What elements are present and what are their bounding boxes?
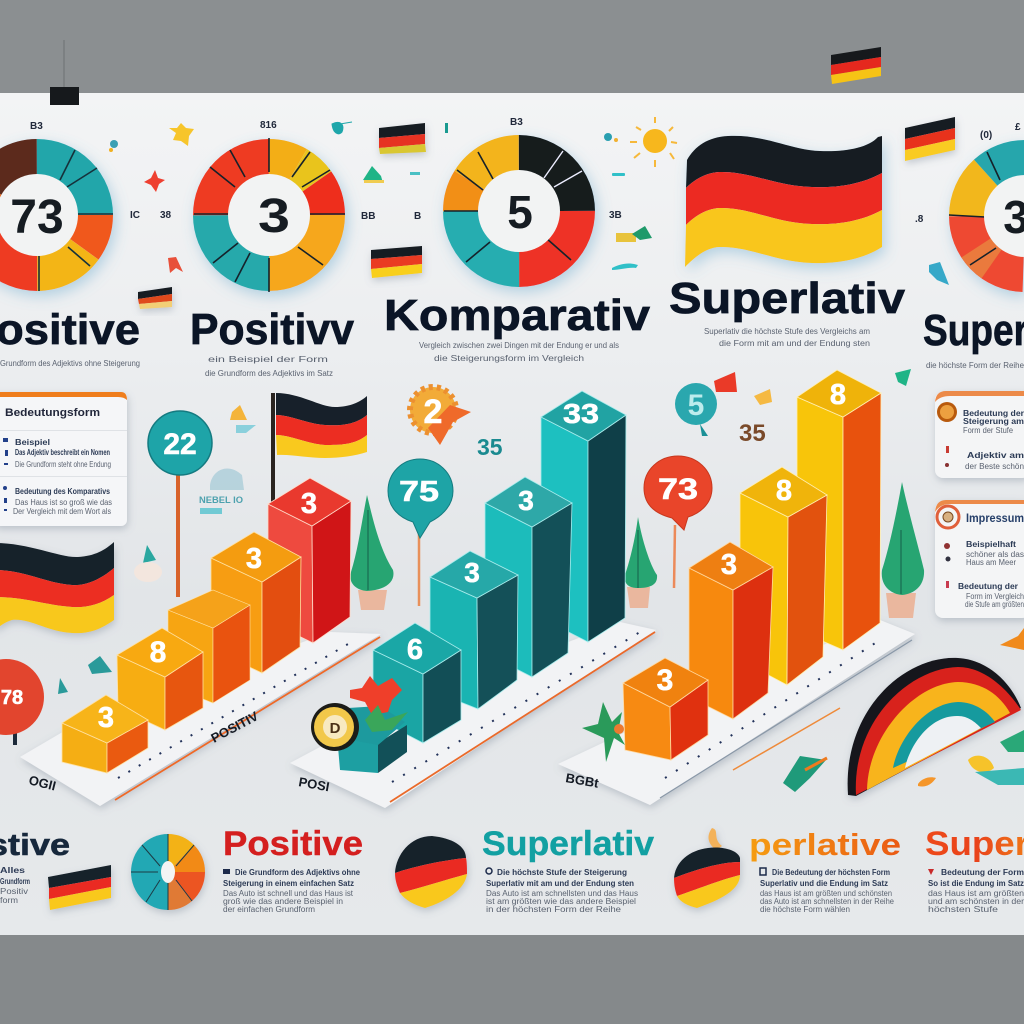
icon: star xyxy=(169,123,194,146)
pin: 22 xyxy=(148,411,212,597)
bar teal mid xyxy=(430,551,518,709)
heading: Positive left: ositive xyxy=(0,306,140,354)
small gauge labels: 3B xyxy=(609,210,622,221)
info card left: Bedeutung des Komparativs xyxy=(15,487,110,496)
footer text 4: Superlativ und die Endung im Satz xyxy=(760,879,888,888)
footer heading: perlative: perlative xyxy=(749,827,901,862)
footer text 3: Die höchste Stufe der Steigerung xyxy=(497,868,627,877)
info card right bottom: Beispielhaft xyxy=(966,540,1016,549)
icon: blue cloud with label xyxy=(199,468,244,514)
info card left: Bedeutungsform xyxy=(5,407,100,419)
bar chart: group 1 Positiv: 3 xyxy=(98,702,114,734)
platform 3 xyxy=(558,620,915,805)
big German flag xyxy=(685,136,882,267)
footer text 4: Die Bedeutung der höchsten Form xyxy=(772,868,890,877)
footer text 2: Die Grundform des Adjektivs ohne xyxy=(235,868,361,877)
bar chart: group 1 Positiv: 3 xyxy=(301,488,317,520)
footer text 2: Das Auto ist schnell und das Haus ist xyxy=(223,889,354,898)
icon: green blob xyxy=(363,166,420,183)
icon: flower pot with coin xyxy=(311,676,408,773)
icon: sun badge 2 xyxy=(410,387,471,445)
icon: teal badge 5 with red flag xyxy=(675,372,737,436)
icon: flower pot with coin: D xyxy=(330,720,341,737)
icon: teal pencil xyxy=(783,756,827,792)
bar yellow tall xyxy=(740,467,827,685)
platform labels: POSI xyxy=(297,774,331,794)
footer text 5: das Haus ist am größten xyxy=(928,889,1024,898)
icon: red figure xyxy=(168,257,183,273)
bar yellow tallest xyxy=(797,370,881,650)
bar chart: group 2 Komparativ: 3 xyxy=(464,557,480,588)
icon: sun badge 2: 2 xyxy=(424,393,442,431)
footer text 1 xyxy=(0,866,30,905)
icon: blue cloud with label: NEBEL IO xyxy=(199,495,243,505)
footer text 2: der einfachen Grundform xyxy=(223,905,315,914)
icon: teal swoosh xyxy=(332,122,352,134)
pin: red left: 78 xyxy=(1,687,23,709)
footer text 5 xyxy=(928,868,1024,914)
flag small 4 xyxy=(905,117,955,161)
label: 35 brown: 35 xyxy=(739,420,766,447)
info card left: Die Grundform steht ohne Endung xyxy=(15,460,111,469)
bar chart: group 3 Superlativ: 3 xyxy=(657,664,673,697)
footer pie xyxy=(131,834,205,910)
caption under headings: Vergleich zwischen zwei Dingen mit der Endung er und als xyxy=(419,341,619,350)
pin: 73 red: 73 xyxy=(658,473,698,506)
bar red xyxy=(268,478,351,643)
icon: confetti right xyxy=(968,628,1024,785)
info card left: Das Haus ist so groß wie das xyxy=(15,498,112,507)
footer text 1: Positiv xyxy=(0,887,28,896)
rainbow arc xyxy=(848,658,1021,796)
info card right top: Adjektiv am xyxy=(967,451,1024,460)
bar chart: group 2 Komparativ: 33 xyxy=(563,398,599,429)
bar chart: group 3 Superlativ: 8 xyxy=(830,379,846,411)
info card right top: Steigerung am xyxy=(963,417,1024,426)
bar chart: group 3 Superlativ xyxy=(623,370,881,760)
small gauge labels: IC xyxy=(130,210,140,221)
pin: red left xyxy=(0,659,44,745)
icon: flag on wall xyxy=(831,47,881,84)
gauge 1 xyxy=(0,150,113,291)
bar teal tallest xyxy=(541,391,626,642)
footer text 1: Alles xyxy=(0,866,26,875)
small gauge labels xyxy=(30,117,1021,225)
platform labels: OGII xyxy=(27,772,58,794)
icon: red star xyxy=(144,170,165,192)
footer flag xyxy=(48,865,111,910)
footer text 3: Das Auto ist am schnellsten und das Haus xyxy=(486,889,638,898)
caption under headings xyxy=(0,327,1024,378)
small gauge labels: 38 xyxy=(160,210,172,221)
icon: teal arrow right xyxy=(929,262,949,285)
info card right top: Form der Stufe xyxy=(963,426,1014,435)
small gauge labels: 816 xyxy=(260,120,277,131)
bar chart: group 2 Komparativ xyxy=(373,391,626,743)
small gauge labels: B3 xyxy=(510,117,523,128)
platform 1 xyxy=(20,632,381,806)
bar amber xyxy=(117,628,203,730)
bar teal tall xyxy=(485,477,572,677)
footer text 5: So ist die Endung im Satz xyxy=(928,879,1024,888)
heading: Superlativ: Superlativ xyxy=(669,274,906,323)
gauge 4 xyxy=(949,152,1024,274)
bar chart: group 1 Positiv xyxy=(62,478,351,773)
footer text 2: groß wie das andere Beispiel in xyxy=(223,897,343,906)
footer text 3: Superlativ mit am und der Endung sten xyxy=(486,879,634,888)
bar teal small xyxy=(373,623,461,743)
label: 35 teal: 35 xyxy=(477,434,503,460)
flag small 1 xyxy=(379,123,426,154)
caption under headings: die Grundform des Adjektivs im Satz xyxy=(205,369,333,378)
footer text 3 xyxy=(486,868,638,914)
pin: 22: 22 xyxy=(163,428,197,461)
footer text 5: und am schönsten in der xyxy=(928,897,1024,906)
platform labels: POSITIV xyxy=(208,708,261,746)
info card right bottom: Bedeutung der xyxy=(958,582,1018,591)
footer heading: Super: Super xyxy=(925,825,1024,863)
bar chart: group 3 Superlativ: 3 xyxy=(721,549,737,581)
footer round flag 1 xyxy=(395,836,467,908)
footer heading: Superlativ: Superlativ xyxy=(482,825,654,863)
gauge 2: 3 xyxy=(258,190,290,243)
tree 3 xyxy=(882,482,924,618)
footer heading: Positive: Positive xyxy=(223,825,363,863)
info card right top xyxy=(935,391,1024,478)
tree 2 xyxy=(625,517,657,608)
pin: 75 xyxy=(388,459,453,606)
footer text 2 xyxy=(223,868,361,914)
gauge 1: 73 xyxy=(10,191,64,244)
lower wall edge xyxy=(0,935,1024,1024)
icon: teal leaves xyxy=(58,656,112,694)
flag small 2 xyxy=(371,246,422,278)
footer text 2: Steigerung in einem einfachen Satz xyxy=(223,879,354,888)
caption under headings: die Steigerungsform im Vergleich xyxy=(434,354,584,363)
platform 2 xyxy=(290,622,656,808)
bar chart: group 2 Komparativ: 3 xyxy=(518,485,534,516)
icon: small confetti right xyxy=(604,133,652,270)
info card right bottom xyxy=(935,500,1024,618)
footer text 4: die höchste Form wählen xyxy=(760,905,850,914)
platform labels: BGBt xyxy=(564,770,600,791)
caption under headings: die höchste Form der Reihe xyxy=(926,361,1024,370)
footer text 3: ist am größten wie das andere Beispiel xyxy=(486,897,636,906)
info card left xyxy=(0,392,127,526)
bar small yellow xyxy=(62,695,148,773)
icon: sun xyxy=(630,117,677,167)
icon: teal marks top xyxy=(445,123,448,133)
footer text 5: Bedeutung der Form xyxy=(941,868,1024,877)
footer text 1: Grundform xyxy=(0,877,30,886)
footer text 4: das Haus ist am größten und schönsten xyxy=(760,889,892,898)
info card left: Das Adjektiv beschreibt ein Nomen xyxy=(15,448,110,457)
info card right bottom: schöner als das xyxy=(966,550,1024,559)
icon: binder clip xyxy=(50,40,79,105)
footer round flag 2 with flame xyxy=(674,828,740,908)
info card right top: der Beste schön xyxy=(965,462,1024,471)
icon: small orange star xyxy=(230,405,256,433)
footer text 1: form xyxy=(0,896,18,905)
info card left: Beispiel xyxy=(15,438,50,447)
flag left wavy xyxy=(0,542,114,633)
small gauge labels: B xyxy=(414,211,421,222)
small gauge labels: £ xyxy=(1015,122,1021,133)
info card left: Der Vergleich mit dem Wort als xyxy=(13,507,111,516)
footer text 4 xyxy=(760,868,895,914)
footer text 4: das Auto ist am schnellsten in der Reihe xyxy=(760,897,895,906)
pin: 75: 75 xyxy=(399,476,439,508)
small gauge labels: BB xyxy=(361,211,375,222)
heading: Komparativ: Komparativ xyxy=(384,291,651,340)
footer text 5: höchsten Stufe xyxy=(928,905,999,914)
flag small 3 xyxy=(138,287,172,309)
bar orange mid xyxy=(689,542,773,719)
small gauge labels: (0) xyxy=(980,130,992,141)
footer text 3: in der höchsten Form der Reihe xyxy=(486,905,622,914)
bar chart: group 1 Positiv: 8 xyxy=(150,636,166,669)
icon: green arrow xyxy=(895,369,911,386)
bar orange tall xyxy=(211,532,301,673)
bar chart: group 1 Positiv: 3 xyxy=(246,543,262,575)
small gauge labels: .8 xyxy=(915,214,924,225)
icon: green plant xyxy=(582,702,625,762)
info card right top: Bedeutung der xyxy=(963,409,1024,418)
info card right bottom: Haus am Meer xyxy=(966,558,1016,567)
bar chart: group 2 Komparativ: 6 xyxy=(407,634,423,666)
bar chart: group 3 Superlativ: 8 xyxy=(776,475,792,507)
caption under headings: die Form mit am und der Endung sten xyxy=(719,339,870,348)
orange accent line xyxy=(733,708,840,770)
small gauge labels: B3 xyxy=(30,121,43,132)
gauge 3 xyxy=(444,151,582,269)
caption under headings: Superlativ die höchste Stufe des Vergleichs am xyxy=(704,327,870,336)
flag with pole xyxy=(271,393,367,503)
bar orange mid xyxy=(168,590,250,703)
caption under headings: ein Beispiel der Form xyxy=(208,355,329,364)
tree 1 xyxy=(350,495,393,610)
heading: Positivv: Positivv xyxy=(190,305,355,354)
icon: teal and cream drop xyxy=(134,545,162,582)
icon: orange leaf xyxy=(918,777,936,787)
caption under headings: Grundform des Adjektivs ohne Steigerung xyxy=(0,359,140,368)
icon: confetti xyxy=(109,140,118,152)
gauge 3: 5 xyxy=(507,186,533,238)
icon: orange shard xyxy=(754,389,772,405)
pin: 73 red xyxy=(644,456,712,588)
icon: teal badge 5 with red flag: 5 xyxy=(688,389,704,422)
gauge 2 xyxy=(194,138,345,292)
bar orange small xyxy=(623,658,708,760)
platform labels xyxy=(27,708,600,794)
